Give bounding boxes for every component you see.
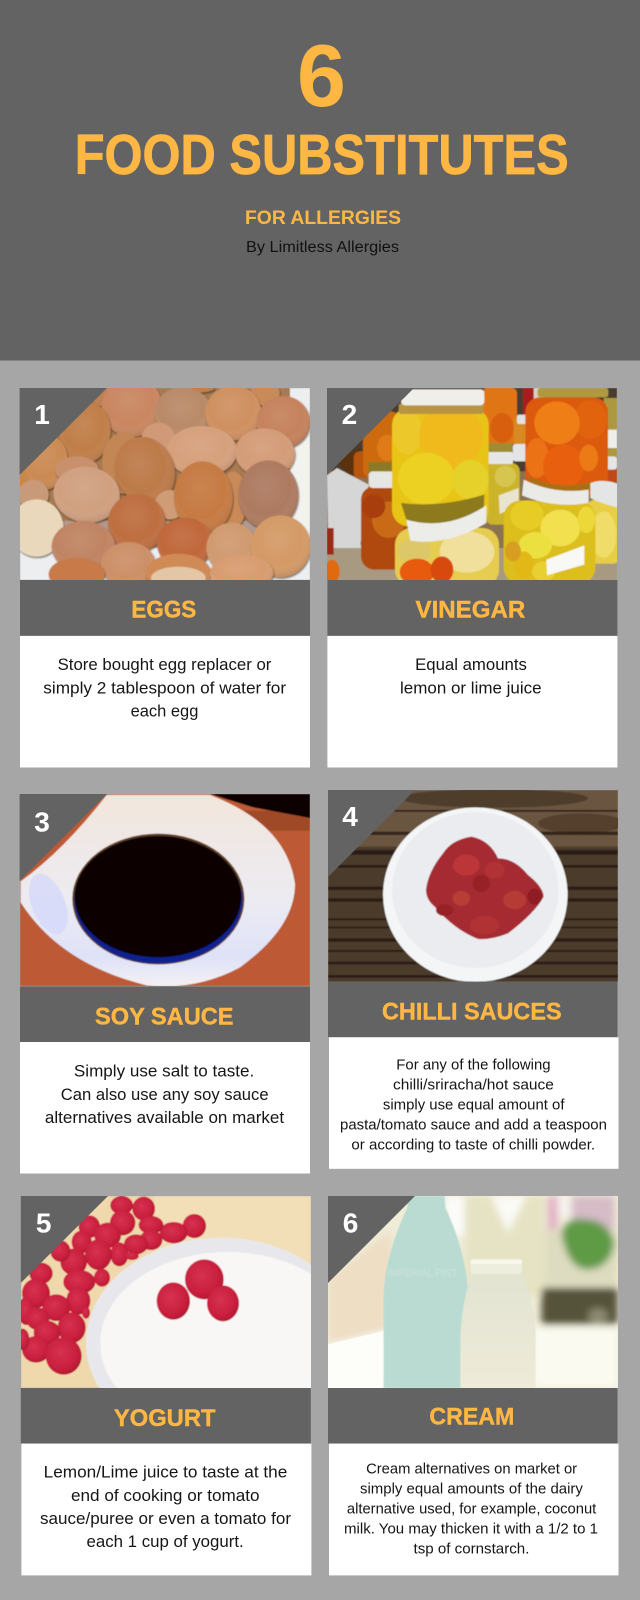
description: chilli sauces: or according to taste of chilli powder. [351, 1137, 595, 1153]
embossed bottle lettering: IMPERIAL PINT [387, 1268, 457, 1280]
byline: By Limitless Allergies [246, 239, 399, 256]
title bar: yogurt [21, 1388, 311, 1444]
description: yogurt: sauce/puree or even a tomato for [40, 1510, 292, 1528]
lower centre jar [395, 528, 499, 586]
corner badge: 6: 6 [343, 1208, 358, 1239]
corner badge: 6 [328, 1196, 415, 1283]
description: vinegar: Equal amounts [415, 656, 527, 674]
description: cream: tsp of cornstarch. [414, 1541, 529, 1557]
corner badge: 1 [20, 388, 107, 475]
panel: cream [328, 1196, 618, 1575]
photo: yogurt with raspberries [21, 1196, 311, 1388]
heading: soy sauce: SOY SAUCE [95, 1003, 234, 1030]
description: chilli sauces: For any of the following [396, 1057, 551, 1073]
title bar: soy sauce [20, 986, 310, 1042]
top right jar [604, 398, 617, 463]
heading: chilli sauces: CHILLI SAUCES [382, 998, 562, 1025]
description: chilli sauces: pasta/tomato sauce and add a teaspoon [340, 1117, 607, 1133]
title bar: eggs [20, 580, 310, 636]
heading: cream: CREAM [429, 1403, 514, 1430]
title bar: vinegar [327, 580, 617, 636]
description: cream: Cream alternatives on market or [366, 1461, 577, 1477]
panel: eggs [10, 376, 311, 768]
subtitle: for allergies: FOR ALLERGIES [245, 208, 401, 229]
photo: soy sauce bowl [20, 794, 310, 986]
description: soy sauce: alternatives available on market [45, 1109, 285, 1127]
description: yogurt: end of cooking or tomato [71, 1487, 260, 1505]
back middle jars [482, 388, 517, 445]
photo: eggs [20, 388, 310, 580]
description: chilli sauces: chilli/sriracha/hot sauce [393, 1077, 554, 1093]
description: yogurt [40, 1464, 292, 1551]
description: eggs [43, 656, 287, 721]
corner badge: 4 [328, 790, 415, 877]
heading: yogurt: YOGURT [114, 1405, 216, 1432]
corner badge: 1: 1 [34, 399, 50, 430]
description: yogurt: Lemon/Lime juice to taste at the [44, 1464, 287, 1482]
corner badge: 3: 3 [34, 807, 50, 838]
corner badge: 4: 4 [342, 801, 358, 832]
header banner [0, 0, 640, 360]
description: chilli sauces: simply use equal amount of [383, 1097, 565, 1113]
description: yogurt: each 1 cup of yogurt. [86, 1533, 244, 1551]
text card: yogurt [21, 1444, 311, 1575]
description: cream [344, 1461, 598, 1557]
corner badge: 3 [20, 794, 107, 881]
panel: chilli sauces [328, 789, 625, 1169]
description: soy sauce: Can also use any soy sauce [61, 1086, 269, 1104]
description: cream: simply equal amounts of the dairy [360, 1481, 584, 1497]
corner badge: 2 [327, 388, 414, 475]
text card: chilli sauces [329, 1037, 618, 1169]
text card: soy sauce [20, 1042, 310, 1174]
panel: yogurt [16, 1196, 356, 1575]
lower right jar [504, 501, 595, 584]
centre top jar [392, 408, 489, 526]
description: eggs: Store bought egg replacer or [58, 656, 272, 674]
heading: vinegar: VINEGAR [416, 596, 525, 623]
title bar: cream [328, 1388, 618, 1444]
text card: eggs [20, 636, 310, 768]
far right jar [587, 500, 620, 564]
panel: vinegar [324, 388, 620, 768]
left jars [354, 451, 370, 478]
text card: vinegar [327, 636, 617, 768]
photo: pickled jars [327, 388, 617, 580]
corner badge: 5: 5 [36, 1208, 51, 1239]
description: vinegar: lemon or lime juice [400, 679, 542, 697]
description: chilli sauces [340, 1057, 607, 1153]
description: eggs: each egg [131, 703, 198, 721]
description: vinegar [400, 656, 542, 697]
photo: chilli sauce dish [328, 790, 618, 982]
title number 6: 6 [297, 26, 346, 125]
title: food substitutes: FOOD SUBSTITUTES [75, 123, 569, 187]
title bar: chilli sauces [328, 982, 618, 1037]
heading: eggs: EGGS [131, 596, 196, 623]
photo: milk bottles [328, 1196, 618, 1388]
description: eggs: simply 2 tablespoon of water for [43, 679, 287, 697]
corner badge: 5 [21, 1196, 108, 1283]
description: soy sauce [45, 1063, 285, 1127]
text card: cream [329, 1444, 618, 1575]
description: cream: milk. You may thicken it with a 1/2 to 1 [344, 1521, 598, 1537]
panel: soy sauce [20, 794, 310, 1174]
description: cream: alternative used, for example, coconut [347, 1501, 596, 1517]
description: soy sauce: Simply use salt to taste. [74, 1063, 254, 1081]
corner badge: 2: 2 [342, 399, 357, 430]
